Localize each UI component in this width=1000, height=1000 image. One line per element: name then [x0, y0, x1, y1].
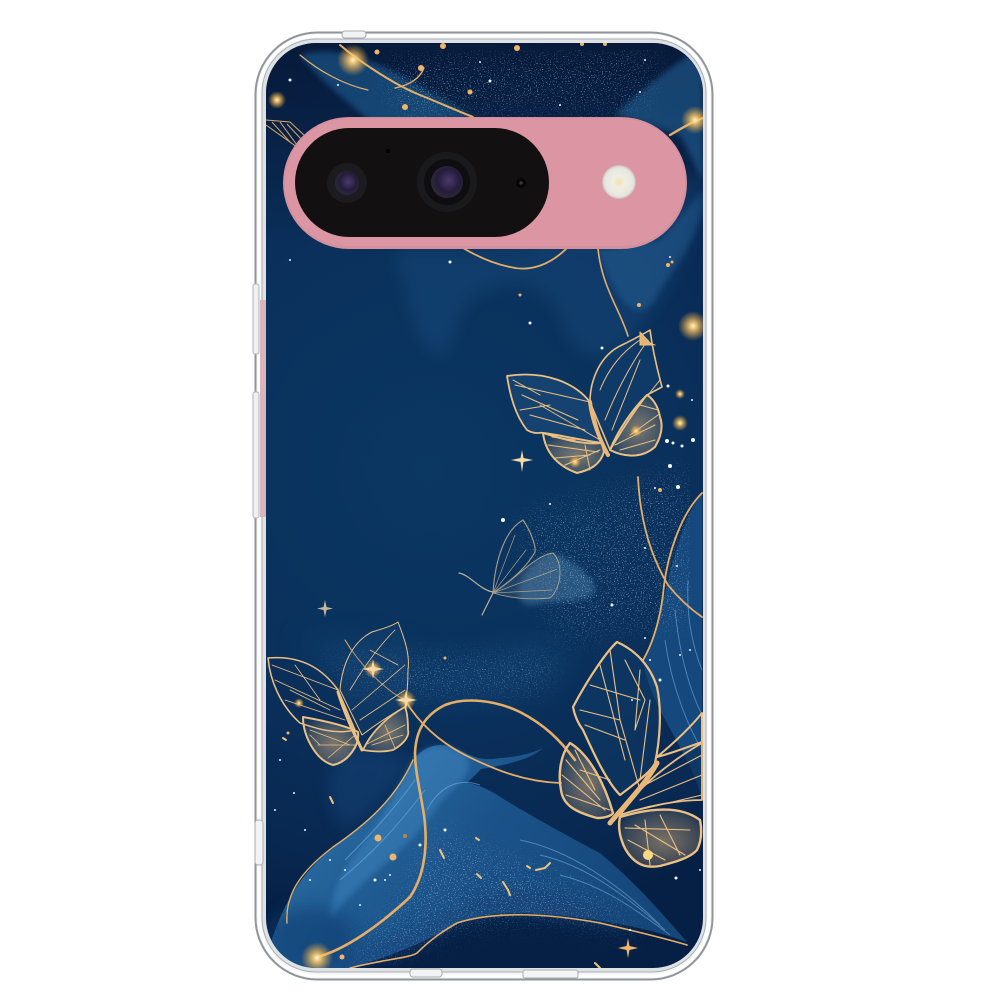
top left wing fragment — [266, 120, 305, 147]
camera window — [295, 128, 549, 237]
butterfly lower right — [560, 642, 702, 867]
butterfly middle faint — [459, 520, 560, 615]
side buttons — [253, 284, 266, 518]
glowing lights — [268, 44, 709, 974]
gold dust dots — [286, 42, 674, 960]
four-point sparkles — [317, 450, 638, 958]
printed back panel — [266, 42, 709, 974]
rear lens main — [417, 152, 477, 212]
phone case product illustration — [252, 30, 714, 980]
gold flecks — [283, 738, 600, 968]
clear case shell — [256, 32, 712, 980]
nebula smoke — [300, 50, 703, 830]
camera bar — [283, 117, 687, 249]
sensors — [386, 149, 526, 188]
bottom port cutouts — [255, 31, 578, 978]
butterfly top right — [507, 330, 662, 473]
butterfly lower left — [268, 622, 408, 765]
rear lens left — [327, 163, 367, 203]
white star dust — [274, 59, 701, 931]
flash — [602, 165, 636, 199]
star dust texture — [320, 50, 690, 965]
lower blue swirl — [266, 580, 702, 968]
gold filament lines — [287, 45, 703, 968]
